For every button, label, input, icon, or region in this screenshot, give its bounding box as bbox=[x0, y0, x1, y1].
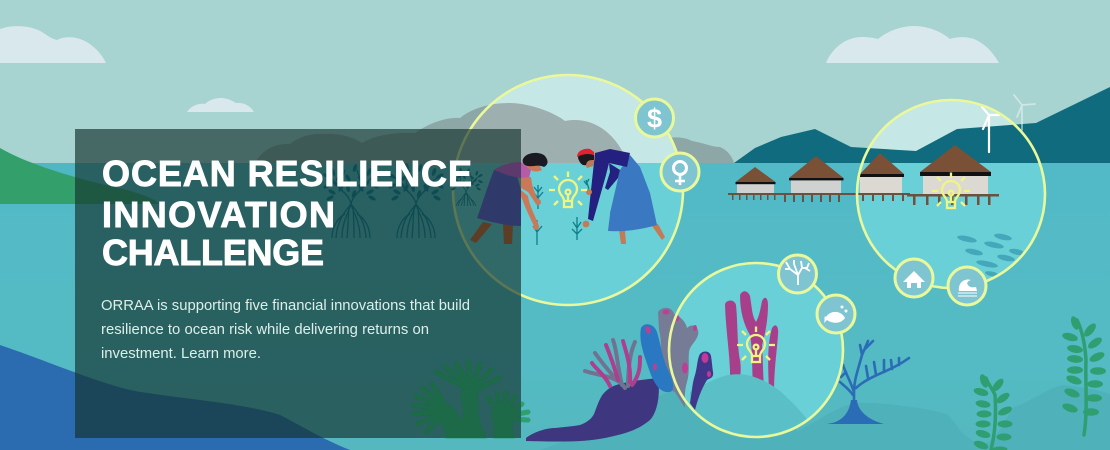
badge: dollar: $ bbox=[647, 104, 662, 134]
fish school bbox=[957, 232, 1025, 278]
purple finger coral bbox=[690, 352, 713, 410]
dock walkway right bbox=[907, 194, 999, 205]
title: CHALLENGE bbox=[102, 232, 324, 273]
seaweed right bbox=[1061, 315, 1106, 435]
magenta corals in lens bbox=[725, 291, 778, 392]
badge: female symbol bbox=[661, 153, 699, 191]
description text: investment. Learn more. bbox=[101, 345, 261, 362]
icon: idea bulb coral bbox=[737, 326, 775, 362]
dark purple rock bbox=[526, 378, 659, 442]
badge: wave bbox=[948, 267, 986, 305]
near-shore water band bbox=[0, 163, 75, 204]
title: INNOVATION bbox=[102, 194, 335, 235]
text panel bbox=[75, 129, 521, 438]
icon: idea bulb farmers bbox=[549, 172, 587, 207]
left woman planting bbox=[470, 153, 548, 244]
seaweed centre right bbox=[973, 373, 1013, 450]
cloud: small centre bbox=[187, 98, 254, 112]
mountain scene lens circle bbox=[472, 76, 682, 304]
island scene lens circle bbox=[858, 101, 1044, 286]
left coral group bbox=[526, 308, 698, 442]
badge: dollar bbox=[636, 99, 674, 137]
mangrove tree 3 bbox=[451, 168, 482, 206]
coral lens circle bbox=[669, 263, 843, 437]
spots bbox=[644, 310, 697, 374]
title bbox=[102, 153, 472, 273]
sea floor mounds bbox=[540, 375, 1110, 450]
house 3 bbox=[860, 153, 904, 193]
title: OCEAN RESILIENCE bbox=[102, 153, 472, 194]
distant grey hills bbox=[255, 103, 628, 163]
green shore hill bbox=[0, 148, 160, 204]
right woman planting bbox=[577, 149, 665, 244]
anemones in panel bbox=[414, 362, 528, 438]
blue wave bbox=[0, 345, 350, 450]
cloud: top left bbox=[0, 26, 106, 63]
lens outline: coral bbox=[669, 263, 843, 437]
blue finger coral bbox=[640, 324, 673, 392]
grey coral bbox=[658, 308, 698, 408]
mangrove tree 2 bbox=[388, 163, 444, 238]
grey hills right bbox=[660, 137, 734, 163]
badge: house bbox=[895, 259, 933, 297]
lens outline: island bbox=[857, 100, 1045, 288]
seedlings bbox=[533, 179, 589, 245]
house 1 bbox=[736, 167, 776, 193]
description text: ORRAA is supporting five financial innovations that build bbox=[101, 297, 470, 314]
mangrove tree 1 bbox=[323, 163, 379, 238]
blue tree coral bbox=[826, 341, 909, 424]
anemones below panel bbox=[414, 362, 528, 438]
house 4 bbox=[920, 145, 991, 194]
badge: coral bbox=[778, 255, 816, 293]
house 2 bbox=[789, 156, 844, 193]
wind turbines bbox=[982, 95, 1035, 152]
lens outline: farmers bbox=[453, 75, 683, 305]
description text bbox=[101, 297, 470, 362]
icon: idea bulb island bbox=[932, 172, 970, 208]
dock walkway left bbox=[728, 193, 910, 202]
branching fan coral bbox=[585, 340, 640, 388]
distant teal mountains bbox=[734, 87, 1110, 163]
sea bbox=[0, 163, 1110, 450]
description text: resilience to ocean risk while delivering returns on bbox=[101, 321, 429, 338]
badge: fish bbox=[817, 295, 855, 333]
cloud: top right bbox=[826, 26, 999, 63]
teal mound in coral lens bbox=[690, 374, 806, 436]
stilt houses bbox=[728, 145, 999, 205]
